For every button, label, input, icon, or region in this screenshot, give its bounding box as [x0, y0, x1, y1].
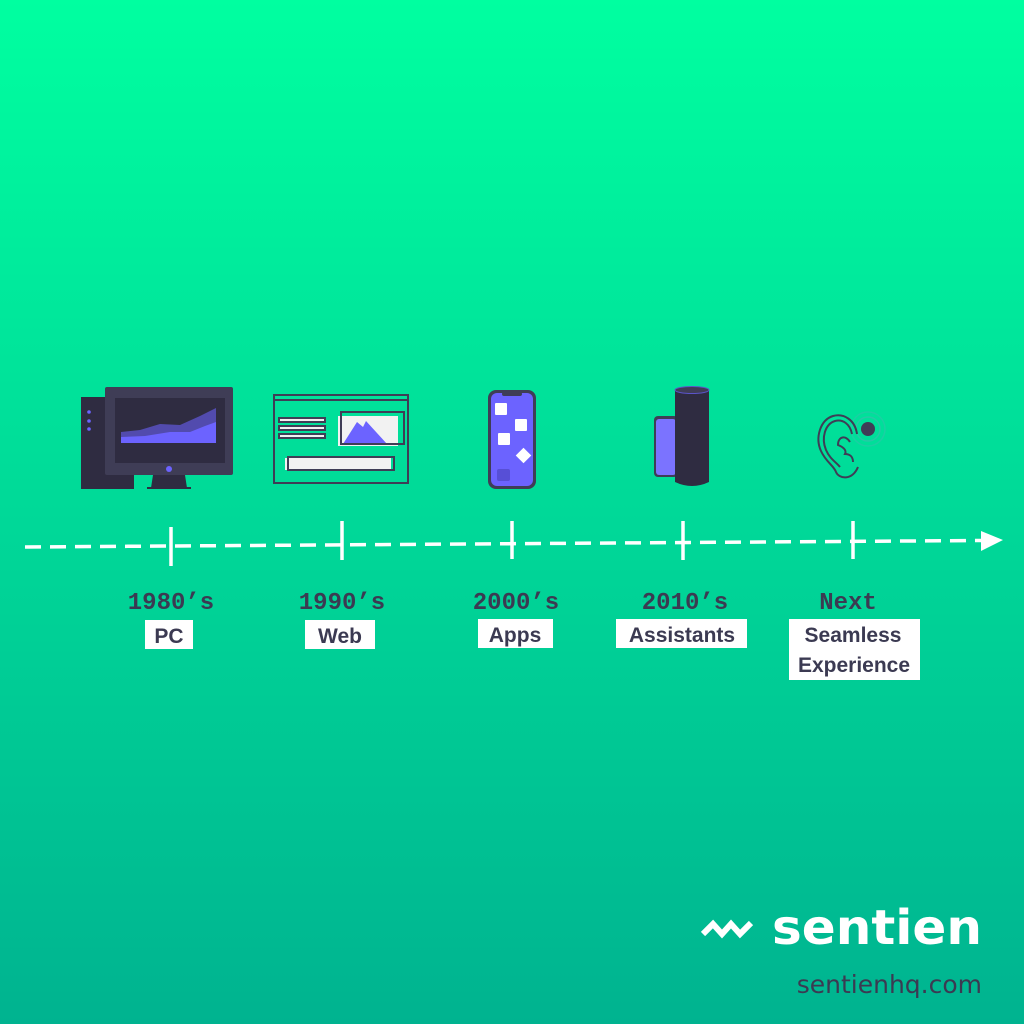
logo: sentien: sentien — [772, 900, 982, 956]
label: 2000's Apps: Apps — [489, 624, 541, 647]
label: 2000's Apps: 2000’s — [473, 590, 559, 617]
label: 1980's PC: PC — [154, 625, 184, 648]
label: 1990's Web: 1990’s — [299, 590, 385, 617]
url: sentienhq.com — [797, 970, 982, 999]
label: Next Seamless Experience: Experience — [798, 654, 910, 677]
label: 1990's Web — [299, 590, 385, 649]
label: 2010's Assistants: 2010’s — [642, 590, 728, 617]
label: Next Seamless Experience: Next — [819, 590, 877, 617]
label: 2010's Assistants — [616, 590, 747, 648]
label: Next Seamless Experience — [789, 590, 920, 680]
label: 1980's PC: 1980’s — [128, 590, 214, 617]
label: 1980's PC — [128, 590, 214, 649]
icon: smartphone with apps — [488, 390, 536, 489]
label: 2010's Assistants: Assistants — [629, 624, 735, 647]
icon: web browser — [274, 395, 408, 483]
label: 1990's Web: Web — [318, 625, 362, 648]
icon: ear with sound — [818, 412, 885, 477]
icon: PC — [81, 387, 233, 489]
label: 2000's Apps — [473, 590, 559, 648]
icon: smart speaker and phone — [654, 386, 709, 486]
timeline arrow — [25, 521, 1003, 566]
label: Next Seamless Experience: Seamless — [805, 624, 901, 647]
